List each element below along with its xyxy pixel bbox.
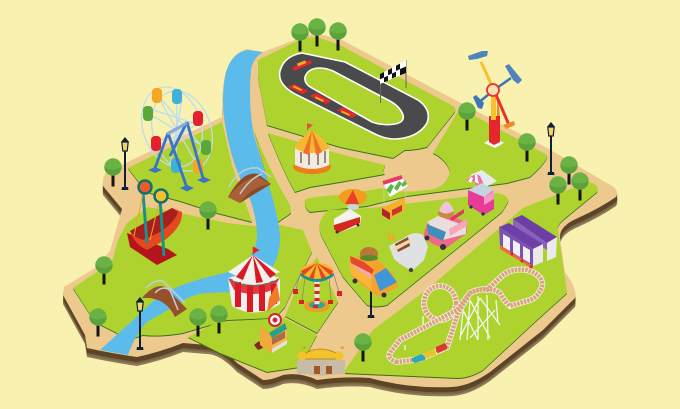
lawn: target stall (188, 318, 317, 372)
target game stall (254, 314, 287, 353)
lawn: race track (258, 37, 455, 158)
blue supports (155, 122, 203, 188)
towers (143, 193, 164, 256)
grey food truck (388, 232, 428, 272)
racing cars (288, 60, 357, 118)
swing ride (293, 263, 342, 312)
entrance gate (297, 346, 345, 376)
base (127, 233, 177, 265)
carousel (293, 123, 331, 174)
bridge lower (142, 281, 187, 317)
lawn: carousel (268, 133, 385, 192)
checkered finish flag (380, 60, 406, 103)
pendulum ride (468, 51, 522, 148)
loop (424, 286, 456, 320)
bridge upper (228, 168, 271, 203)
lawn: swing ride (285, 257, 338, 333)
wheel rims (132, 79, 222, 179)
lawn: strip below plaza (305, 108, 547, 212)
gondolas (143, 88, 211, 174)
roller coaster (389, 270, 542, 363)
ferris wheel (132, 79, 222, 192)
river (100, 50, 280, 355)
track (389, 270, 542, 362)
tan ground and paths (63, 34, 617, 387)
circus tent (228, 247, 280, 313)
street lamps (121, 122, 555, 350)
lawn: food trucks (320, 193, 508, 306)
lattice support (460, 295, 500, 340)
island side wall (63, 36, 617, 396)
swinging boat ride (127, 180, 182, 265)
target discs (138, 180, 152, 194)
ice cream truck (424, 202, 467, 250)
purple trailers (499, 215, 557, 269)
striped stall cart (382, 177, 408, 220)
race track (280, 53, 428, 139)
lawn: between river and path (254, 130, 291, 222)
lawn: lower left with river (73, 207, 312, 340)
track asphalt (280, 53, 428, 139)
lawn: ferris wheel (128, 122, 252, 222)
pink ice cream cart (466, 170, 497, 216)
boat hull (130, 208, 182, 250)
lawn: roller coaster (343, 182, 598, 378)
burger food truck (349, 247, 398, 298)
trees (89, 18, 589, 362)
parasol cart (334, 189, 367, 234)
coaster cars (412, 354, 425, 363)
